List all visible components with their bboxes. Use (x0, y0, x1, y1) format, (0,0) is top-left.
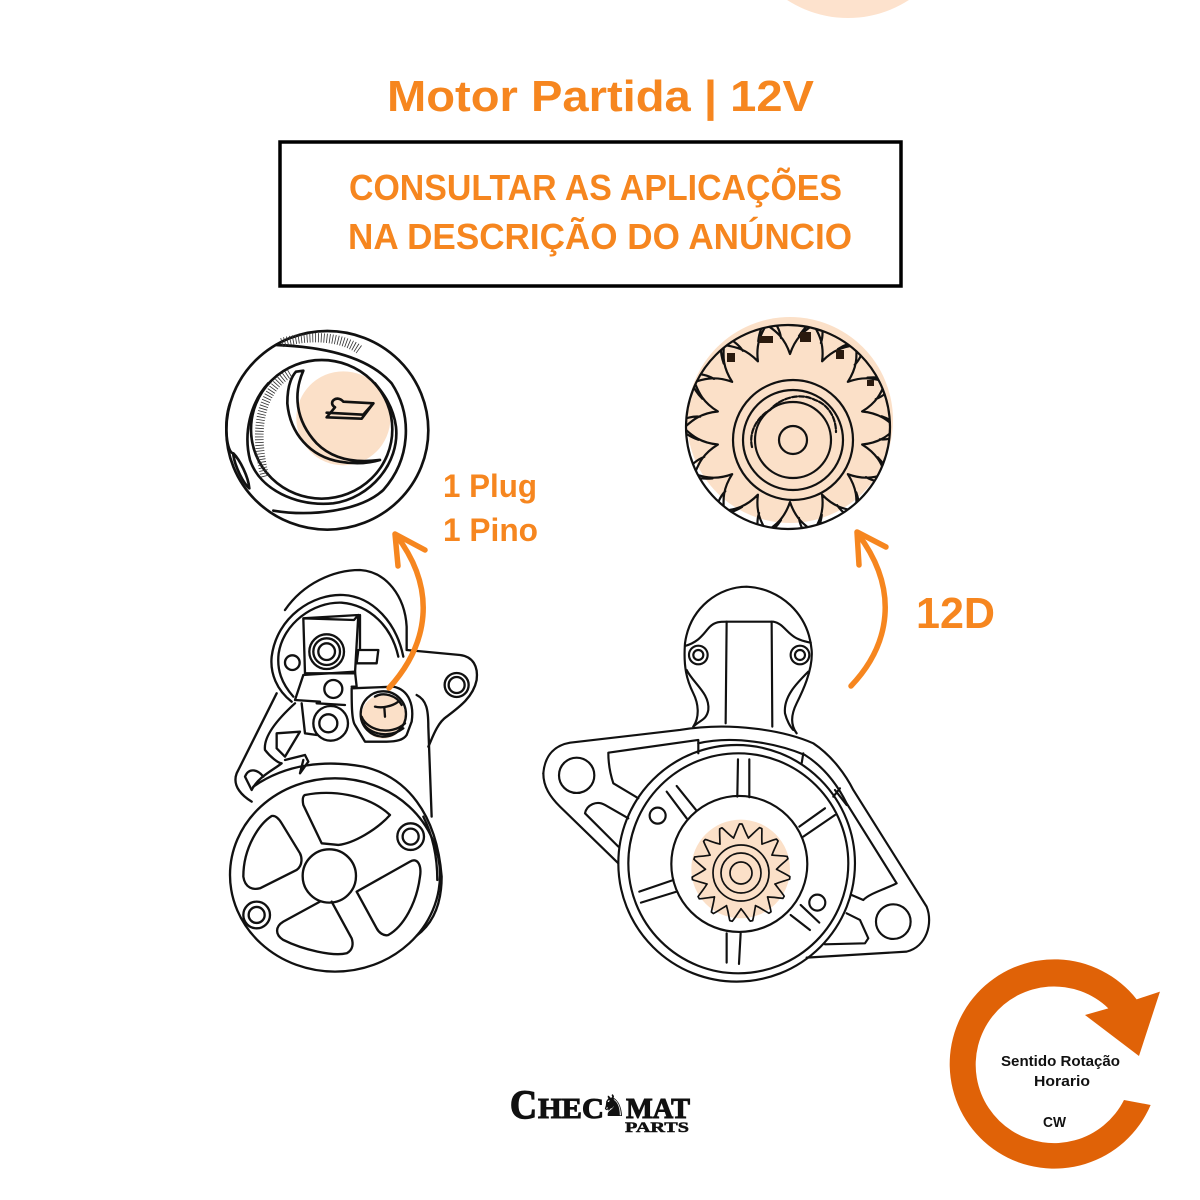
front pinion gear (691, 824, 791, 922)
rotation direction badge (950, 959, 1160, 1169)
solenoid housing (285, 570, 407, 650)
logo: Checkmat Parts: ♞ (600, 1089, 627, 1124)
title: Motor Partida | 12V (387, 72, 815, 122)
arrow: pinion to gear detail (851, 532, 886, 686)
bracket (407, 650, 477, 747)
pinion gear detail circle (684, 317, 893, 530)
rotation text: Sentido Rotação (1001, 1053, 1120, 1070)
starter motor: front view (543, 587, 929, 982)
rotation text: Horario (1034, 1073, 1090, 1090)
logo: Checkmat Parts: MAT (626, 1094, 690, 1125)
notice box (280, 142, 901, 286)
icon: clockwise arrow (950, 959, 1160, 1169)
label: 1 plug 1 pino: 1 Plug (443, 468, 537, 504)
logo: Checkmat Parts: HEC (538, 1094, 604, 1125)
logo: Checkmat Parts: C (510, 1082, 537, 1127)
notice box: CONSULTAR AS APLICAÇÕES (349, 166, 842, 208)
terminal housing (352, 687, 412, 742)
decorative peach circle at top edge (736, 0, 960, 18)
arrow: connector to plug detail (389, 534, 425, 688)
logo: Checkmat Parts: PARTS (625, 1120, 689, 1136)
rotation text (1001, 1053, 1120, 1131)
starter motor: rear view (230, 570, 477, 972)
label: 1 plug 1 pino (443, 468, 538, 548)
notice box: NA DESCRIÇÃO DO ANÚNCIO (348, 215, 852, 257)
logo: Checkmat Parts (510, 1082, 690, 1136)
rear cap (253, 764, 442, 936)
left arm (235, 693, 277, 802)
label: 12D: 12D (916, 589, 995, 638)
rotation text: CW (1043, 1114, 1067, 1131)
label: 1 plug 1 pino: 1 Pino (443, 512, 538, 548)
connector detail: plug circle (226, 331, 428, 530)
